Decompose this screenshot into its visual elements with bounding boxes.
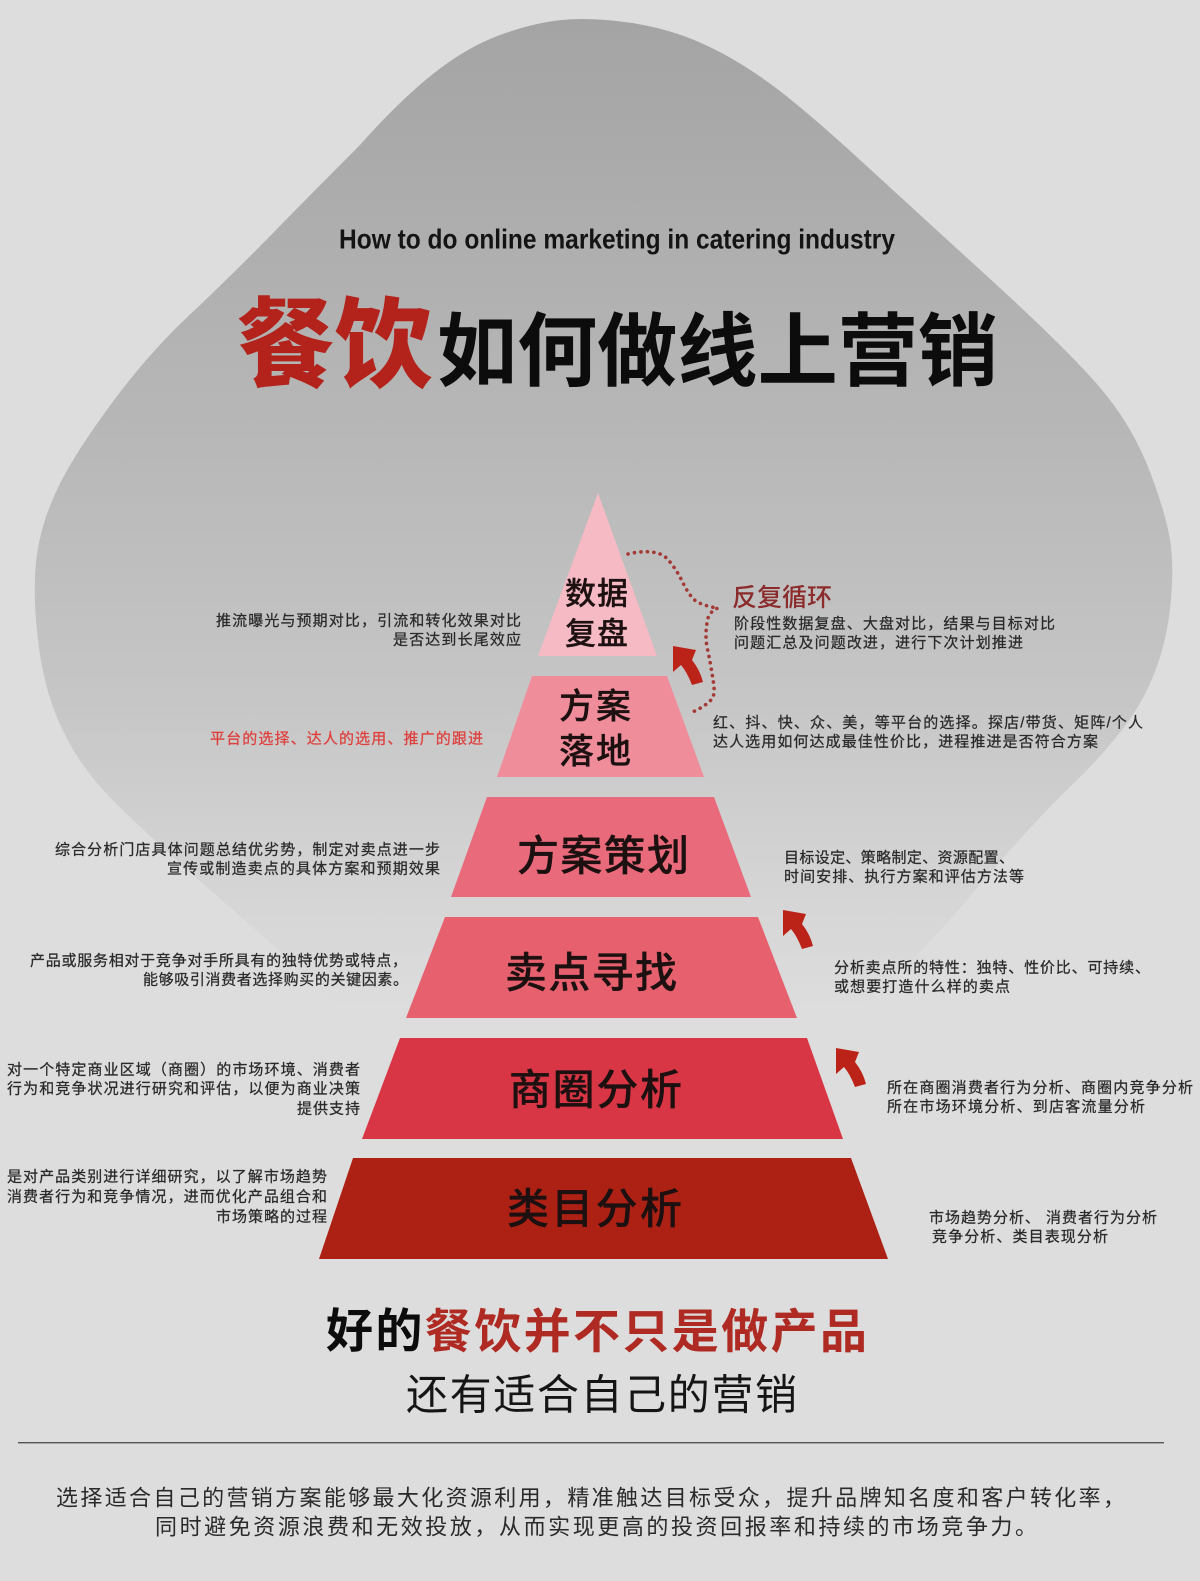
right description: 方案落地: 红、抖、快、众、美，等平台的选择。探店/带货、矩阵/个人 [713,714,1143,732]
left description: 类目分析: 消费者行为和竞争情况，进而优化产品组合和 [7,1188,327,1206]
right description: 类目分析 [929,1210,1157,1246]
arrow: 卖点寻找 to 方案策划 [783,910,813,949]
right description: 数据复盘: 阶段性数据复盘、大盘对比，结果与目标对比 [734,614,1055,632]
left description: 数据复盘: 是否达到长尾效应 [393,630,521,648]
tier: 方案落地: 方案 [559,688,631,726]
left description: 数据复盘 [216,612,521,648]
right description: 类目分析: 竞争分析、类目表现分析 [932,1228,1108,1246]
left description: 商圈分析: 提供支持 [297,1100,360,1118]
right description: 卖点寻找: 或想要打造什么样的卖点 [834,978,1010,996]
left description: 类目分析: 是对产品类别进行详细研究，以了解市场趋势 [7,1168,327,1186]
tier: 卖点寻找 [406,917,797,1018]
right description: 商圈分析 [887,1078,1193,1116]
left description: 卖点寻找: 产品或服务相对于竞争对手所具有的独特优势或特点， [30,952,407,970]
background blob shape [35,19,1172,1060]
right description: 商圈分析: 所在市场环境分析、到店客流量分析 [887,1098,1145,1116]
main title: 如何做线上营销 [437,308,998,396]
tier: 数据复盘 [538,493,657,656]
heading: 反复循环: 反复循环 [732,584,832,612]
main title [237,290,998,400]
left description: 卖点寻找 [30,952,408,988]
right description: 卖点寻找 [834,960,1150,996]
tier: 类目分析 [319,1158,888,1259]
left description: 类目分析 [7,1168,327,1226]
feedback loop dotted line [628,552,718,713]
tier: 类目分析: 类目分析 [507,1186,682,1232]
closing headline [326,1304,867,1418]
right description: 方案落地 [713,714,1143,750]
main title: 餐饮 [237,290,432,400]
closing paragraph [56,1486,1125,1540]
tier: 方案策划: 方案策划 [517,832,689,880]
closing headline: 还有适合自己的营销 [406,1372,797,1418]
arrow: 方案落地 to 数据复盘 [673,646,703,685]
right description: 卖点寻找: 分析卖点所的特性：独特、性价比、可持续、 [834,960,1150,976]
tier: 方案落地: 落地 [559,732,631,772]
right description: 方案落地: 达人选用如何达成最佳性价比，进程推进是否符合方案 [713,732,1098,750]
left description: 方案落地 (red): 平台的选择、达人的选用、推广的跟进 [210,730,483,748]
arrow: 类目分析 to 商圈分析 [836,1048,866,1087]
left description: 商圈分析: 对一个特定商业区域（商圈）的市场环境、消费者 [7,1060,360,1078]
right description: 商圈分析: 所在商圈消费者行为分析、商圈内竞争分析 [887,1078,1193,1096]
right description: 数据复盘 [734,614,1055,652]
closing headline: 好的餐饮并不只是做产品 [326,1304,867,1358]
right description: 方案策划: 时间安排、执行方案和评估方法等 [784,868,1024,886]
tier: 商圈分析 [362,1038,843,1139]
left description: 方案策划 [55,842,440,878]
right description: 方案策划 [784,850,1024,886]
tier: 方案策划 [451,797,751,897]
divider line [18,1442,1164,1443]
right description: 类目分析: 市场趋势分析、 消费者行为分析 [929,1210,1157,1226]
closing paragraph: 同时避免资源浪费和无效投放，从而实现更高的投资回报率和持续的市场竞争力。 [155,1514,1037,1540]
tier: 商圈分析: 商圈分析 [509,1066,682,1114]
tier: 卖点寻找: 卖点寻找 [505,950,677,996]
tier: 数据复盘: 数据 [565,576,628,612]
right description: 方案策划: 目标设定、策略制定、资源配置、 [784,850,1014,866]
left description: 方案策划: 宣传或制造卖点的具体方案和预期效果 [167,860,440,878]
left description: 商圈分析: 行为和竞争状况进行研究和评估，以便为商业决策 [7,1080,360,1098]
left description: 方案策划: 综合分析门店具体问题总结优劣势，制定对卖点进一步 [55,842,440,858]
left description: 数据复盘: 推流曝光与预期对比，引流和转化效果对比 [216,612,521,630]
left description: 卖点寻找: 能够吸引消费者选择购买的关键因素。 [143,972,408,988]
tier: 方案落地 [497,676,704,777]
left description: 商圈分析 [7,1060,360,1118]
subtitle in English: How to do online marketing in catering industry [339,224,895,254]
right description: 数据复盘: 问题汇总及问题改进，进行下次计划推进 [734,634,1023,652]
closing paragraph: 选择适合自己的营销方案能够最大化资源利用，精准触达目标受众，提升品牌知名度和客户转化率， [56,1486,1125,1510]
tier: 数据复盘: 复盘 [565,616,628,652]
pyramid [319,493,888,1259]
left description: 类目分析: 市场策略的过程 [216,1208,327,1226]
